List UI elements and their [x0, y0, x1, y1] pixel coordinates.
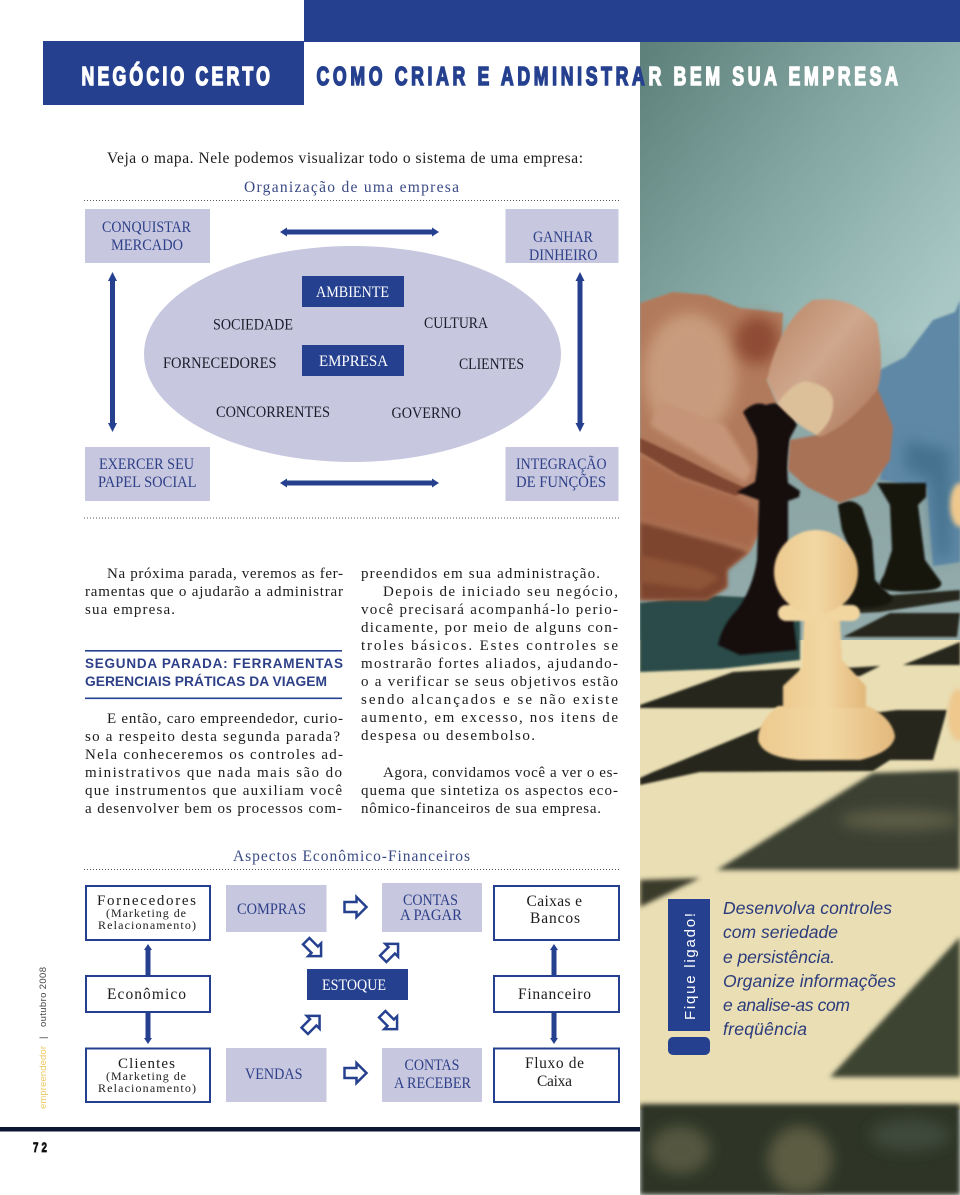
- arrow: financeiro to caixas: [550, 944, 558, 975]
- article column 2: nômico-financeiros de sua empresa.: [361, 801, 601, 817]
- callout text: Organize informações: [723, 971, 896, 991]
- box: ganhar dinheiro: DINHEIRO: [529, 247, 598, 264]
- page title: COMO CRIAR E ADMINISTRAR BEM SUA EMPRESA: [316, 62, 898, 91]
- heading: aspectos econômico-financeiros: Aspectos Econômico-Financeiros: [233, 848, 470, 865]
- article column 1: ramentas que o ajudarão a administrar: [85, 584, 343, 600]
- article column 1: Nela conheceremos os controles ad-: [85, 747, 343, 763]
- box: fornecedores: (Marketing de: [106, 906, 186, 920]
- arrow: compras to estoque: [300, 935, 327, 962]
- far right white piece: [948, 483, 960, 741]
- article column 2: troles básicos. Estes controles se: [361, 638, 618, 654]
- header band: [304, 0, 960, 42]
- box: clientes: (Marketing de: [106, 1069, 186, 1083]
- box: ganhar dinheiro: [506, 209, 618, 264]
- arrow: econômico to fornecedores: [144, 944, 152, 975]
- box: fluxo de caixa: Caixa: [537, 1073, 572, 1090]
- third finger shadow: [640, 522, 748, 600]
- article column 1: sua empresa.: [85, 602, 175, 618]
- box: clientes: Clientes: [118, 1056, 175, 1072]
- arrow: vendas to estoque: [298, 1010, 326, 1037]
- box: fluxo de caixa: [494, 1048, 619, 1102]
- pawn head: [774, 530, 858, 614]
- page number: 72: [33, 1139, 47, 1155]
- chess board base: [640, 640, 960, 1110]
- box: contas a pagar: CONTAS: [403, 892, 458, 909]
- box: vendas: [226, 1048, 326, 1102]
- article column 1: Na próxima parada, veremos as fer-: [107, 566, 343, 582]
- ellipse labels: CLIENTES: [459, 356, 524, 373]
- lower shirt sleeve shadow: [905, 440, 950, 560]
- article column 1: a desenvolver bem os processos com-: [85, 801, 342, 817]
- box: integração de funções: DE FUNÇÕES: [516, 474, 606, 491]
- box: fornecedores: Relacionamento): [98, 918, 196, 932]
- article column 2: você precisará acompanhá-lo perio-: [361, 602, 618, 618]
- article column 2: sendo alcançados e se não existe: [361, 692, 618, 708]
- box: fluxo de caixa: Fluxo de: [525, 1055, 584, 1072]
- box: contas a receber: A RECEBER: [394, 1075, 472, 1092]
- callout text: freqüência: [723, 1019, 807, 1039]
- arrow: left vertical: [108, 272, 117, 432]
- arrow: econômico to clientes: [144, 1013, 152, 1044]
- article column 2: Agora, convidamos você a ver o es-: [383, 765, 618, 781]
- box: compras: [226, 885, 326, 932]
- arrow: financeiro to fluxo: [550, 1013, 558, 1044]
- ellipse labels: FORNECEDORES: [163, 355, 276, 372]
- ellipse labels: [163, 315, 524, 422]
- dark board squares: [640, 590, 960, 785]
- subheading: segunda parada: [85, 650, 343, 699]
- box: ambiente: AMBIENTE: [316, 284, 389, 301]
- black queen piece: [718, 403, 800, 655]
- box: exercer seu papel social: EXERCER SEU: [99, 456, 194, 473]
- box: empresa: [302, 345, 404, 376]
- ellipse labels: SOCIEDADE: [213, 316, 293, 334]
- box: financeiro: Financeiro: [518, 986, 591, 1003]
- ellipse labels: GOVERNO: [392, 405, 461, 422]
- box: caixas e bancos: [494, 886, 619, 940]
- arrow: vendas to contas a receber: [344, 1063, 366, 1083]
- ellipse labels: CONCORRENTES: [216, 404, 330, 421]
- article column 1: E então, caro empreendedor, curio-: [107, 711, 343, 727]
- box: estoque: ESTOQUE: [322, 977, 386, 994]
- box: caixas e bancos: Caixas e: [526, 893, 582, 910]
- callout text: [723, 898, 896, 1039]
- diagram: aspectos econômico-financeiros: [86, 883, 619, 1102]
- pawn collar: [778, 605, 860, 621]
- arrow: compras to contas a pagar: [344, 897, 366, 917]
- pawn stem: [783, 620, 866, 708]
- third finger highlight: [640, 555, 720, 590]
- thumb nail: [778, 381, 833, 435]
- arrow: top horizontal: [280, 228, 439, 236]
- ellipse labels: CULTURA: [424, 315, 489, 332]
- section tag: NEGÓCIO CERTO: [82, 62, 270, 91]
- box: fornecedores: [86, 886, 210, 940]
- heading: organização de uma empresa: Organização de uma empresa: [244, 179, 459, 196]
- hand mass: [640, 292, 783, 600]
- table edge: [640, 595, 800, 672]
- callout badge: fique ligado: Fique ligado!: [682, 913, 699, 1020]
- index finger highlight: [650, 415, 752, 482]
- rook piece: [877, 483, 941, 592]
- box: compras: COMPRAS: [237, 901, 306, 918]
- vertical folio text: outubro 2008: [38, 967, 49, 1027]
- article column 1: so a respeito desta segunda parada?: [85, 729, 340, 745]
- box: contas a receber: CONTAS: [404, 1057, 460, 1074]
- box: exercer seu papel social: PAPEL SOCIAL: [98, 474, 196, 491]
- palm shadow: [735, 316, 779, 364]
- box: integração de funções: [506, 447, 618, 501]
- ellipse: ambiente: [144, 246, 561, 462]
- vertical folio text: |: [38, 1037, 49, 1039]
- callout text: com seriedade: [723, 922, 838, 942]
- diagram: organização de uma empresa: [85, 209, 618, 501]
- photo: hands moving chess pieces: [640, 42, 960, 1195]
- box: vendas: VENDAS: [245, 1066, 302, 1083]
- photo backdrop: [640, 42, 960, 439]
- arrow: estoque to contas a pagar: [377, 938, 404, 965]
- blurred foreground board marks: [650, 810, 960, 1194]
- thumb: [767, 299, 881, 437]
- box: clientes: [86, 1048, 210, 1102]
- footer rule: [0, 1127, 640, 1132]
- article column 2: o a verificar se seus objetivos estão: [361, 674, 618, 690]
- white pawn piece: [758, 530, 895, 760]
- crease between index and middle finger: [640, 438, 750, 496]
- shirt sleeve: [870, 300, 960, 566]
- box: estoque: [307, 969, 408, 1000]
- article column 2: quema que sintetiza os aspectos eco-: [361, 783, 618, 799]
- pawn base: [758, 706, 895, 760]
- box: financeiro: [494, 976, 619, 1012]
- section tag box: [43, 41, 304, 105]
- box: empresa: EMPRESA: [319, 353, 389, 370]
- box: econômico: [86, 976, 210, 1012]
- article column 1: que instrumentos que auxiliam você: [85, 783, 342, 799]
- back of hand: [788, 387, 893, 503]
- callout badge: fique ligado: [668, 899, 710, 1055]
- box: contas a receber: [382, 1048, 482, 1102]
- intro sentence: Veja o mapa. Nele podemos visualizar todo o sistema de uma empresa:: [107, 150, 583, 167]
- article column 2: despesa ou desembolso.: [361, 728, 535, 744]
- box: ganhar dinheiro: GANHAR: [533, 229, 594, 246]
- subheading: segunda parada: SEGUNDA PARADA: FERRAMENTAS: [85, 656, 343, 671]
- callout text: e analise-as com: [723, 995, 850, 1015]
- box: contas a pagar: [382, 883, 482, 932]
- arrow: bottom horizontal: [280, 478, 439, 488]
- lower backdrop behind the pieces: [640, 330, 960, 640]
- callout text: e persistência.: [723, 947, 835, 967]
- article column 2: [361, 566, 618, 817]
- box: contas a pagar: A PAGAR: [400, 907, 463, 924]
- arrow: estoque to contas a receber: [376, 1008, 403, 1035]
- box: conquistar mercado: CONQUISTAR: [102, 219, 192, 236]
- box: conquistar mercado: [85, 209, 210, 263]
- article column 2: preendidos em sua administração.: [361, 566, 600, 582]
- article column 2: aumento, em excesso, nos itens de: [361, 710, 618, 726]
- box: fornecedores: Fornecedores: [97, 893, 196, 909]
- box: conquistar mercado: MERCADO: [111, 237, 183, 254]
- box: integração de funções: INTEGRAÇÃO: [516, 456, 606, 473]
- middle finger: [640, 455, 760, 548]
- subheading: segunda parada: GERENCIAIS PRÁTICAS DA VIAGEM: [85, 674, 327, 689]
- large blurred board squares: [640, 770, 960, 1195]
- article column 1: ministrativos que nada mais são do: [85, 765, 342, 781]
- article column 1: [85, 566, 343, 817]
- box: econômico: Econômico: [107, 986, 186, 1003]
- callout text: Desenvolva controles: [723, 898, 892, 918]
- box: ambiente: [302, 276, 404, 307]
- box: caixas e bancos: Bancos: [530, 910, 580, 927]
- box: clientes: Relacionamento): [98, 1081, 196, 1095]
- vertical folio text: empreendedor: [38, 1046, 49, 1109]
- vertical folio text: [38, 967, 49, 1109]
- knuckle highlight: [644, 313, 736, 437]
- box: exercer seu papel social: [85, 447, 210, 501]
- article column 2: dicamente, por meio de alguns con-: [361, 620, 618, 636]
- article column 2: Depois de iniciado seu negócio,: [383, 584, 618, 600]
- article column 2: mostrarão fortes aliados, ajudando-: [361, 656, 618, 672]
- arrow: right vertical: [576, 272, 584, 432]
- bishop piece: [838, 501, 892, 608]
